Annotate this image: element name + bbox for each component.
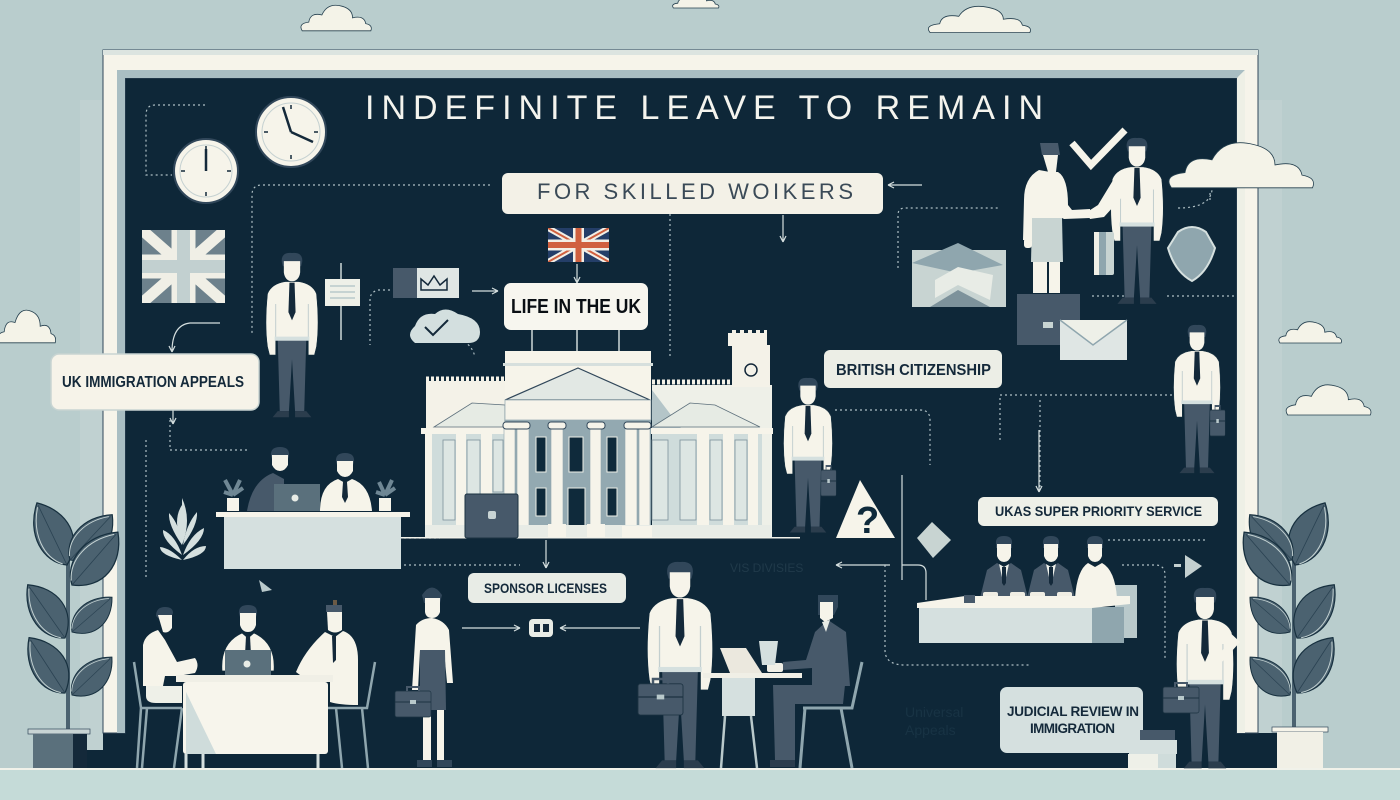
figure: seated man in suit xyxy=(767,595,850,767)
briefcase xyxy=(638,679,683,715)
chair xyxy=(800,662,862,768)
label: UKAS super priority service xyxy=(978,497,1218,526)
figure: man hand on hip xyxy=(1163,588,1240,768)
building xyxy=(400,330,800,538)
dashed connectors xyxy=(146,105,1235,665)
icon: warning triangle: ? xyxy=(856,500,879,542)
icon: wall clock large xyxy=(256,97,326,167)
label: judicial review in immigration: IMMIGRATION xyxy=(1030,721,1115,736)
icon: diamond badge xyxy=(917,522,951,558)
label: life in the UK: LIFE IN THE UK xyxy=(511,296,641,318)
safe box xyxy=(465,494,518,538)
roof supports xyxy=(532,330,619,351)
icon: two-way node xyxy=(529,619,553,637)
label: judicial review in immigration xyxy=(1000,687,1143,753)
plant left xyxy=(15,495,133,768)
icon: envelope xyxy=(1060,320,1127,360)
tabletop and body xyxy=(176,675,333,682)
label: UKAS super priority service: UKAS SUPER PRIORITY SERVICE xyxy=(995,503,1202,519)
wing windows xyxy=(443,440,747,520)
cornice xyxy=(421,428,505,434)
label: life in the UK xyxy=(504,283,648,330)
icon: stack of books xyxy=(1128,730,1177,768)
clouds xyxy=(0,0,1371,415)
solid connectors and arrows xyxy=(169,182,1042,631)
faint label: universal appeals: Universal xyxy=(905,704,963,720)
label: sponsor licenses xyxy=(468,573,626,603)
faint label: universal appeals xyxy=(905,704,963,738)
side wall strips xyxy=(80,100,1282,750)
icon: shield xyxy=(1168,227,1215,281)
label: UK immigration appeals xyxy=(51,354,259,410)
icon: cloud with tick xyxy=(410,310,480,343)
figure: man with case right side xyxy=(1174,325,1225,473)
worker in dark jacket xyxy=(247,447,289,511)
icon: wall clock small xyxy=(174,139,238,203)
worker centre xyxy=(222,605,274,671)
floor strip xyxy=(0,768,1400,800)
title: INDEFINITE LEAVE TO REMAIN xyxy=(365,89,1043,127)
window frame xyxy=(103,50,1258,733)
label: for skilled workers: FOR SKILLED WOIKERS xyxy=(537,179,853,204)
figure: woman xyxy=(1023,143,1090,293)
worker right xyxy=(296,600,358,705)
worker in shirt xyxy=(320,453,372,511)
faint label: universal appeals: Appeals xyxy=(905,722,956,738)
centre recess xyxy=(505,420,651,537)
icon: open envelope xyxy=(912,243,1006,307)
left wing xyxy=(426,381,506,538)
faint label: visa divisions: VIS DIVISIES xyxy=(730,561,803,575)
base xyxy=(425,525,771,538)
small plant left xyxy=(224,480,243,511)
label: UK immigration appeals: UK IMMIGRATION APPEALS xyxy=(62,374,244,391)
figure: standing man by flag xyxy=(266,253,318,417)
label: British citizenship: BRITISH CITIZENSHIP xyxy=(836,362,991,379)
icon: small fragment xyxy=(259,580,272,592)
team at table lower left xyxy=(134,600,375,768)
icon: warning triangle xyxy=(836,480,895,542)
right wing xyxy=(652,385,772,538)
desk xyxy=(216,512,410,517)
small plant right xyxy=(376,480,395,511)
handshake scene xyxy=(1023,130,1163,304)
figure: man with case beside building xyxy=(784,378,836,533)
meeting scene xyxy=(638,562,862,768)
icon: dark folder xyxy=(1017,294,1080,345)
icon: silver leaf sprig xyxy=(160,498,206,560)
laptop xyxy=(225,650,271,675)
icon: tick xyxy=(1072,130,1125,165)
dark board xyxy=(87,78,1280,768)
figure: standing man xyxy=(647,562,713,768)
centre windows and door xyxy=(536,437,617,534)
wing pediments xyxy=(434,403,505,427)
label: judicial review in immigration: JUDICIAL REVIEW IN xyxy=(1007,704,1139,719)
central block xyxy=(505,351,651,421)
chair back xyxy=(1115,585,1137,638)
worker left xyxy=(143,607,198,703)
columns xyxy=(504,428,650,528)
figure: man xyxy=(1111,138,1163,304)
table xyxy=(703,673,802,678)
icon: crown card xyxy=(393,268,459,298)
figure: woman with case xyxy=(395,588,453,767)
papers and cup xyxy=(720,648,762,673)
desk with two workers xyxy=(216,447,410,569)
icon: striped panel xyxy=(1094,232,1114,275)
label: for skilled workers xyxy=(502,173,883,214)
chairs xyxy=(134,662,182,768)
icon: colour union flag xyxy=(548,228,609,262)
label: British citizenship xyxy=(824,350,1002,388)
laptop xyxy=(274,484,320,511)
tower xyxy=(732,345,770,387)
icon: play arrow xyxy=(1174,555,1202,578)
plant right xyxy=(1229,495,1347,768)
panel desk with three officials xyxy=(917,536,1137,643)
icon: document on post xyxy=(325,263,360,340)
label: sponsor licenses: SPONSOR LICENSES xyxy=(484,580,607,596)
icon: grey union flag xyxy=(142,230,225,303)
